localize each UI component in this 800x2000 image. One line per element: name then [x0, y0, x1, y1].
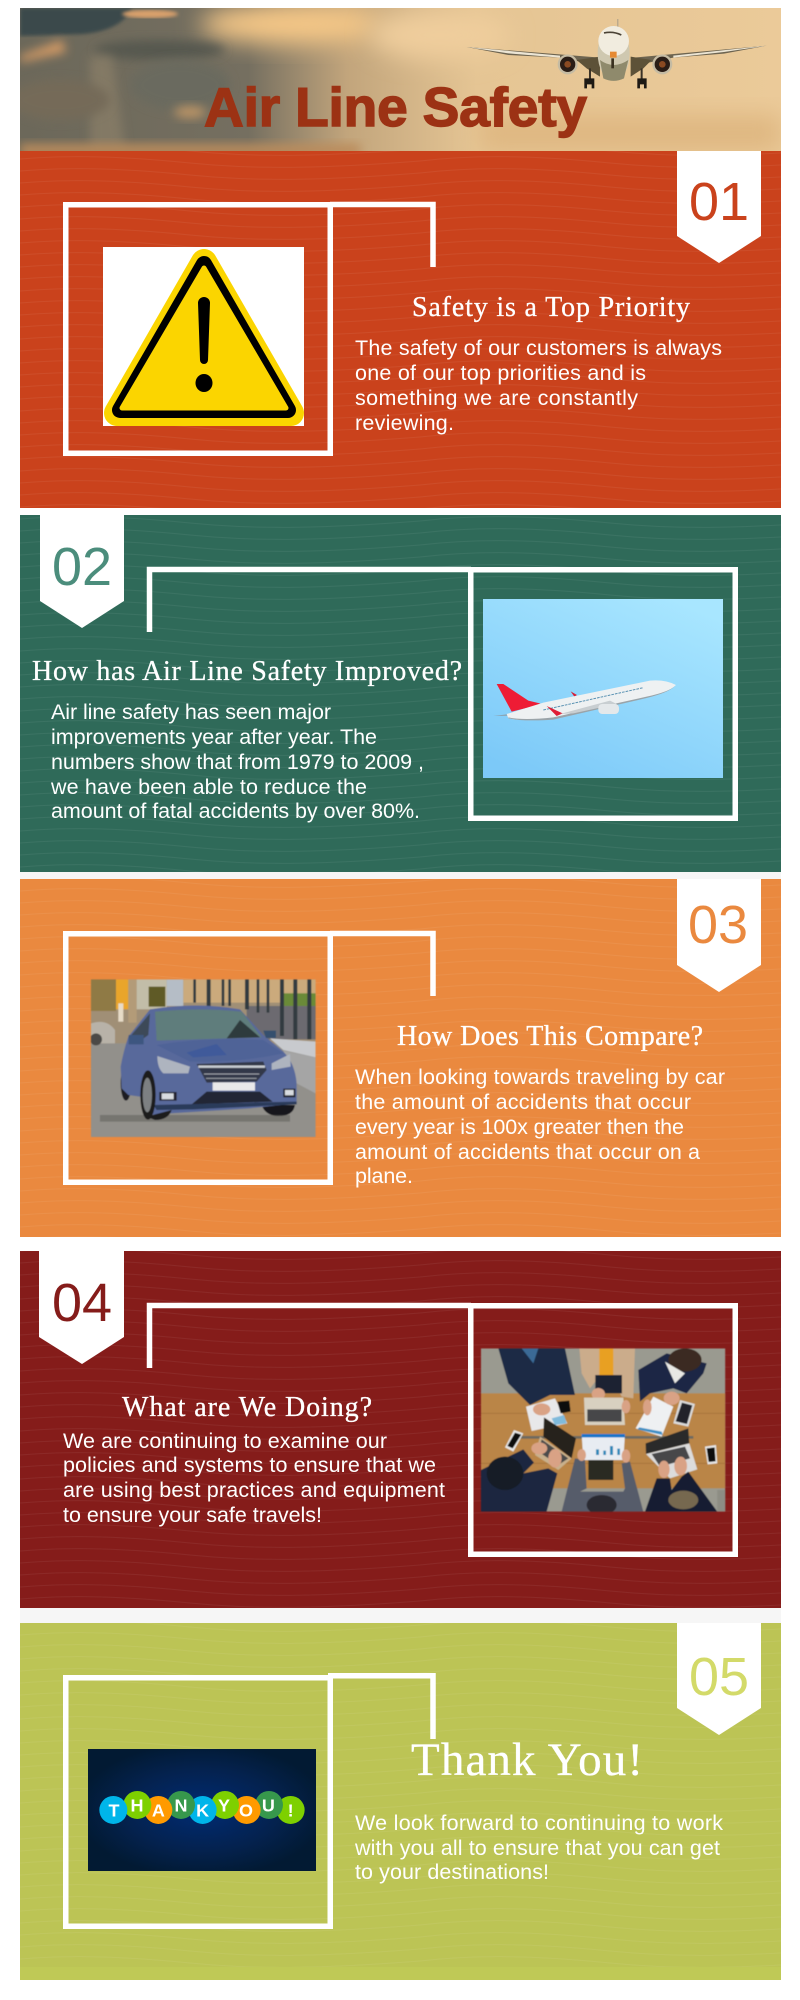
- body text: [355, 336, 722, 435]
- panel 3: comparison: [20, 879, 781, 1237]
- frame with connector: [150, 570, 735, 818]
- badge 03: 03: [688, 895, 748, 955]
- image: thank you circles: N: [174, 1796, 187, 1816]
- panel 3 background: [20, 879, 781, 1237]
- heading: Thank You!: [411, 1734, 643, 1786]
- body text: We look forward to continuing to work: [355, 1811, 723, 1835]
- body text: [50, 700, 424, 823]
- frame with connector: [66, 1676, 433, 1926]
- body text: one of our top priorities and is: [355, 361, 646, 385]
- image: thank you circles: O: [239, 1801, 253, 1821]
- body text: plane.: [355, 1164, 413, 1188]
- body text: amount of fatal accidents by over 80%.: [51, 799, 420, 823]
- badge 05: [677, 1623, 761, 1735]
- image: thank you circles: [88, 1749, 316, 1871]
- panel 4 background: [20, 1251, 781, 1608]
- photo: plane in blue sky: [483, 599, 723, 778]
- badge 01: [677, 151, 761, 263]
- body text: reviewing.: [355, 411, 454, 435]
- body text: policies and systems to ensure that we: [63, 1453, 436, 1477]
- body text: amount of accidents that occur on a: [355, 1140, 700, 1164]
- panel 5 background: [20, 1623, 781, 1980]
- image: thank you circles: T: [108, 1801, 119, 1821]
- body text: to ensure your safe travels!: [63, 1503, 322, 1527]
- image: thank you circles: A: [152, 1801, 165, 1821]
- image: thank you circles: U: [262, 1796, 275, 1816]
- panel 1 background: [20, 151, 781, 508]
- panel 2 background: [20, 515, 781, 872]
- heading: How has Air Line Safety Improved?: [32, 656, 462, 687]
- panel 2: improvement: [20, 515, 781, 872]
- title: Air Line Safety: [204, 76, 587, 138]
- heading: Safety is a Top Priority: [412, 292, 690, 323]
- body text: something we are constantly: [355, 386, 638, 410]
- body text: [354, 1811, 723, 1884]
- badge 01: 01: [689, 172, 749, 232]
- body text: improvements year after year. The: [51, 725, 377, 749]
- image: thank you circles: H: [130, 1796, 143, 1816]
- body text: the amount of accidents that occur: [355, 1090, 691, 1114]
- photo: team meeting at table: [481, 1348, 725, 1515]
- heading: What are We Doing?: [122, 1392, 372, 1423]
- badge 04: [39, 1251, 124, 1364]
- badge 02: [40, 515, 124, 628]
- badge 04: 04: [52, 1273, 112, 1333]
- panel 4: what we are doing: [20, 1251, 781, 1608]
- badge 03: [677, 879, 761, 992]
- body text: are using best practices and equipment: [63, 1478, 445, 1502]
- frame with connector: [150, 1306, 735, 1554]
- header sunset photo: [10, 4, 781, 156]
- header banner: [10, 4, 781, 156]
- panel separator: [20, 1608, 781, 1623]
- heading: How Does This Compare?: [397, 1021, 703, 1052]
- body text: Air line safety has seen major: [51, 700, 331, 724]
- body text: we have been able to reduce the: [50, 775, 367, 799]
- body text: numbers show that from 1979 to 2009 ,: [51, 750, 424, 774]
- body text: [355, 1065, 725, 1188]
- panel 1: safety priority: [20, 151, 781, 508]
- body text: [63, 1429, 445, 1527]
- body text: to your destinations!: [355, 1860, 549, 1884]
- body text: The safety of our customers is always: [355, 336, 722, 360]
- image: thank you circles: Y: [218, 1796, 230, 1816]
- body text: We are continuing to examine our: [63, 1429, 387, 1453]
- body text: with you all to ensure that you can get: [354, 1836, 720, 1860]
- body text: When looking towards traveling by car: [355, 1065, 725, 1089]
- frame with connector: [66, 934, 433, 1182]
- badge 02: 02: [52, 537, 112, 597]
- image: thank you circles: K: [196, 1801, 209, 1821]
- body text: every year is 100x greater then the: [355, 1115, 684, 1139]
- panel separator: [20, 872, 781, 879]
- icon: warning sign: [103, 247, 304, 426]
- image: thank you circles: !: [288, 1801, 294, 1821]
- badge 05: 05: [689, 1647, 749, 1707]
- photo: blue car: [90, 979, 317, 1137]
- frame with connector: [66, 204, 433, 453]
- airplane front view: [467, 19, 767, 88]
- panel 5: thank you: [20, 1623, 781, 1980]
